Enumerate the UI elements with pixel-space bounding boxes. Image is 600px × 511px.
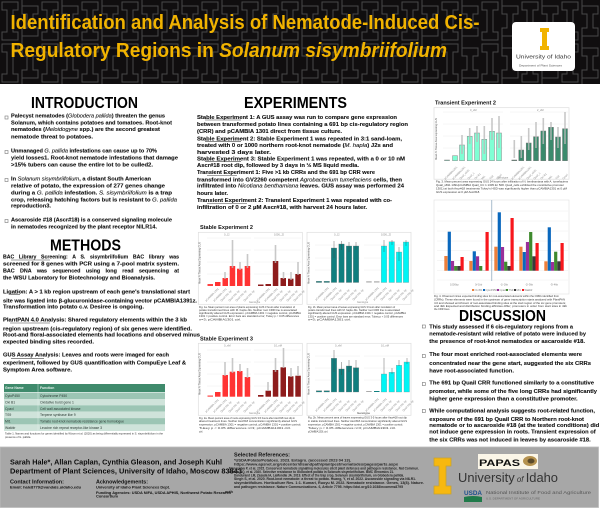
caption: stable experiment 2, leaves	[199, 305, 301, 322]
header banner	[0, 0, 600, 84]
table: gene names and functions: Wakblr	[5, 426, 16, 430]
bullet list: introduction: Palecyst nematodes (Globodera pallida) threaten the genus	[11, 114, 165, 120]
text block: methods: BAC Library Screening: A S. sisymbriifolium BAC library was	[3, 254, 179, 260]
bullet list: discussion: While computational analysis suggests root-related function,	[429, 408, 595, 414]
bar chart: transient experiment 2: 0_uM	[470, 108, 476, 112]
table: gene names and functions: CytoP450	[5, 394, 20, 398]
caption: transient experiment 2: Fig. 3. Mean percent area expressing GUS 24 hours after infiltration of N. benthamiana with A. tumefaciens	[436, 180, 568, 184]
bullet list: introduction: >15% tubers can cause the entire lot to be culled2.	[11, 162, 153, 168]
bullet list: introduction: Ascaroside #18 (Ascr#18) is a conserved signaling molecule	[11, 218, 172, 224]
legend: Cpaxl	[500, 288, 507, 292]
bar chart: stable experiment 3, red: Quail 691 bp	[219, 400, 233, 413]
bullet list: introduction: reproduction3.	[11, 204, 51, 210]
text block: experiments: (CRR) and pCAMBIA 1301 direct from tissue culture.	[197, 129, 342, 135]
selected references: Singh S, et al. 2020. Root-knot nematode: a threat to potato. Huang, Y, et al. 2022. Ascaroside signaling via NILR1.	[234, 477, 416, 481]
bar chart: stable experiment 3, teal and cyan: Quail 691 bp	[329, 399, 343, 412]
bar chart: stable experiment 3, red: pCAMBIA 1301	[263, 398, 279, 413]
bar chart: stable experiment 2, red: pCAMBIA 1301	[212, 287, 228, 302]
acknowledgements	[96, 480, 232, 499]
logo: University of Idaho department badge: Department of Plant Sciences	[519, 64, 563, 68]
bar chart: stable experiment 3, red: 0_nM	[224, 344, 230, 348]
bar chart: stable experiment 2, red	[198, 232, 306, 304]
title: Regulatory Regions in Solanum sisymbriifolium	[10, 40, 447, 62]
caption: stable experiment 2, roots: significantly altered GUS expression. pCAMBIA 1301 = negative control, pCAMBIA	[308, 311, 406, 315]
bar chart: stable experiment 3, red: Quail 691 bp	[278, 400, 292, 413]
authors and affiliation	[10, 460, 242, 476]
table caption: presence of G. pallida.	[5, 435, 31, 439]
selected references: *USDA/Potato/Potatoes. 2023. Extagro. (accessed 2023 04 13).	[234, 459, 351, 463]
bar chart: transient experiment 2: TS9	[488, 174, 495, 180]
caption: transient experiment 2: Quail_s691 1391/pCAMBIA Quail_CC 1 1305.for 508. Quail_cells exhibited the constitutive promoter	[436, 183, 564, 187]
bar chart: stable experiment 2, teal and cyan: Quail 691 bp	[344, 288, 358, 301]
text block: methods: BAC DNA was sequenced using long read sequencing at	[3, 268, 179, 274]
text block: experiments: hours later.	[197, 191, 228, 197]
logo: University of Idaho department badge	[512, 22, 575, 71]
bar chart: stable experiment 2, teal and cyan: Quail 691 bp	[337, 288, 351, 301]
table: gene names and functions: Function	[40, 386, 54, 390]
text block: methods: experiment, followed by GUS quantification with CompuEye Leaf &	[3, 361, 186, 367]
bar chart: stable experiment 2, red: Quail 691 bp	[219, 289, 233, 302]
text block: experiments: infiltration of 0 or 2 µM Ascr#18, with harvest 24 hours later.	[197, 205, 367, 211]
bar chart: stable experiment 3, red	[198, 343, 306, 415]
bar chart: stable experiment 2, teal and cyan	[307, 232, 415, 304]
bar chart: stable experiment 2, teal and cyan: 0_J2	[334, 232, 340, 236]
bar chart: stable experiment 3, red: pCAMBIA 1301	[212, 398, 228, 413]
bullet list: discussion: The four most enriched root-associated elements were	[429, 352, 582, 358]
bar chart: stable experiment 3, teal and cyan: pCAMBIA 1301	[314, 397, 330, 412]
bar chart: stable experiment 3, teal and cyan: Quail 691 bp	[401, 399, 415, 412]
text block: experiments: Ascr#18 root dip, followed by 3 days in ½ MS liquid media.	[197, 162, 359, 169]
bar chart: transient experiment 2: Mean % Tissue Area Expressing GUS	[435, 118, 438, 160]
bar chart: stable experiment 3, teal and cyan: Quail 691 bp	[387, 399, 401, 412]
caption: stable experiment 3, leaves: altered treatment lines. Neither Ascr#18 concentration significantly altered GUS	[199, 419, 297, 423]
legend: Wakblr	[524, 288, 533, 292]
bar chart: transient experiment 2: pCAMBIA1301	[443, 165, 459, 180]
bar chart: regulatory elements by upstream distance: -2/-3kb	[525, 282, 534, 286]
bar chart: stable experiment 2, red: pCAMBIA 1301	[263, 287, 279, 302]
caption: regulatory elements: (CRRs). These elements were found in the upstream of gene transcription starts analyzed with PlantPAN	[434, 298, 565, 302]
bar chart: transient experiment 2: pCAMBIA1301	[510, 165, 526, 180]
contact information: Contact Information:	[10, 480, 64, 486]
heading: discussion: DISCUSSION	[459, 308, 546, 325]
bar chart: regulatory elements by upstream distance	[434, 200, 569, 294]
bar chart: stable experiment 2, red: Quail 691 bp	[242, 289, 256, 302]
table: gene names and functions: Cytochrome P450	[40, 394, 67, 398]
selected references: Manosalva P, et al. 2015. Conserved nematode signalling molecules elicit plant defenses and pathogen resistance. Nat Commun.	[229, 466, 419, 470]
bar chart: stable experiment 3, red: pCAMBIA 1301	[204, 398, 220, 413]
bar chart: stable experiment 2, red: Quail 691 bp	[227, 289, 241, 302]
caption: stable experiment 3, roots	[308, 416, 407, 434]
bullet list: discussion	[422, 324, 600, 444]
bullet list: introduction: Unmanaged G. pallida infestations can cause up to 70%	[11, 149, 157, 155]
text block: experiments: Stable Experiment 1: A GUS assay was run to compare gene expression	[197, 115, 398, 121]
bullet list: discussion: promoter, while some of the five long CRRs had significantly	[429, 389, 598, 395]
bar chart: transient experiment 2: Quail_s691	[525, 168, 538, 180]
text block: experiments: Transient Experiment 2: Transient Experiment 1 was repeated with co-	[197, 198, 392, 204]
bar chart: stable experiment 2, teal and cyan: Genotype	[357, 300, 369, 304]
selected references: and pathogen resistance. Nature Communications. 6, Article 7795. https://doi.org/10.1038/ncomms8795	[234, 485, 403, 489]
caption: regulatory elements: the CRR lines.	[434, 307, 450, 311]
bullet list: introduction: relative of potato, the expression of 277 genes change	[11, 184, 165, 190]
caption: stable experiment 3, leaves: Fig. 2a. Mean percent area of roots expressing GUS 3-5 hours after Ascr#18 root dip in	[199, 416, 295, 420]
bar chart: stable experiment 2, teal and cyan: Quail 691 bp	[351, 288, 365, 301]
bar chart: stable experiment 2, teal and cyan: 1000_J2	[381, 232, 392, 236]
table: gene names and functions: TS9	[5, 413, 11, 417]
bar chart: transient experiment 2: pCAMBIA1391	[517, 165, 533, 180]
bar chart: stable experiment 2, red: pCAMBIA 1301	[204, 287, 220, 302]
text block: methods	[3, 254, 200, 374]
table: gene names and functions: MI1	[5, 420, 11, 424]
bar chart: regulatory elements by upstream distance: 0/-1kb	[475, 282, 483, 286]
acknowledgements: University of Idaho Plant Sciences Dept.	[96, 485, 170, 490]
logo: USDA NIFA	[464, 490, 592, 502]
logo: University of Idaho wordmark: University of Idaho	[458, 470, 558, 485]
bar chart: stable experiment 2, teal and cyan: pCAMBIA 1301	[364, 286, 380, 301]
bar chart: stable experiment 3, red: Quail 691 bp	[227, 400, 241, 413]
caption: stable experiment 2, leaves: 1301 = positive control. Error bars are standard error; Tukey p < 0.05 differences	[199, 314, 299, 318]
bar chart: stable experiment 3, teal and cyan	[307, 343, 415, 415]
selected references: https://www.apsnet.org/edcenter/disandpath/plantpest/nematodes/pages/parts.aspx	[234, 462, 399, 466]
bar chart: regulatory elements by upstream distance: -1/-2kb	[500, 282, 509, 286]
panel: experiments	[197, 95, 415, 434]
table: gene names and functions: Gene Name	[5, 386, 24, 390]
text block: experiments: between transformed potato lines containing a 691 bp cis-regulatory region	[197, 122, 409, 128]
bar chart: transient experiment 2: Oxi B1	[539, 172, 548, 180]
bar chart: stable experiment 2, teal and cyan: pCAMBIA 1301	[322, 286, 338, 301]
bar chart: stable experiment 2, red: Quail 691 bp	[270, 289, 284, 302]
text block: methods: site was ligated into β-glucuronidase-containing vector pCAMBIA1391z.	[3, 299, 197, 305]
bar chart: stable experiment 3, teal and cyan: Quail 691 bp	[344, 399, 358, 412]
bar chart: transient experiment 2: TS9	[554, 174, 561, 180]
table: gene names and functions: Leucine rich repeat receptor-like kinase 3	[40, 426, 102, 430]
caption: stable experiment 3, leaves	[199, 416, 301, 434]
table caption	[5, 432, 163, 439]
panel: methods	[3, 238, 200, 439]
caption: stable experiment 2, leaves: significantly altered GUS expression. pCAMBIA 1301 = negative control, pCAMBIA	[199, 311, 301, 315]
caption: stable experiment 3, roots: in stable transformed lines. Neither Ascr#18 concentration significantly altered GUS	[308, 419, 407, 423]
caption: stable experiment 2, roots: potato transformed lines with M. hapla J2s. Neither root CRR line is associated	[308, 308, 400, 312]
bullet list: discussion: nematode or to ascaroside #18 (at the tested conditions) did	[429, 423, 600, 429]
bullet list: discussion: The 691 bp Quail CRR functioned similarly to a constitutive	[429, 381, 594, 387]
logo: USDA NIFA: National Institute of Food and Agriculture	[486, 490, 592, 495]
legend: Oxi B1	[474, 288, 483, 292]
bullet list: discussion: not induce gene expression in roots. Transient expression of	[429, 430, 596, 436]
bullet list: introduction: Solanum, which contains potatoes and tomatoes. Root-knot	[11, 120, 172, 126]
caption: stable experiment 3, roots: Fig. 2b. Mean percent area of leaves expressing GUS 3-5 hours after Ascr#18 root dip	[308, 416, 407, 420]
bullet list: introduction	[5, 114, 178, 231]
bar chart: stable experiment 3, red: Quail 691 bp	[285, 400, 299, 413]
bullet list: discussion: nematode-resistant wild relative of potato were induced by	[429, 331, 587, 337]
table: gene names and functions	[4, 384, 165, 439]
caption: transient experiment 2	[436, 180, 568, 194]
bar chart: regulatory elements by upstream distance: -3/-4kb	[550, 282, 559, 286]
bar chart: stable experiment 3, red: Mean % Tissue Area Expressing GUS	[198, 353, 202, 395]
bar chart: stable experiment 2, teal and cyan: Quail 691 bp	[401, 288, 415, 301]
table: gene names and functions: Terpene synthase like 9	[40, 413, 76, 417]
bar chart: transient experiment 2: 2_uM	[537, 108, 544, 112]
bar chart: stable experiment 2, teal and cyan: Quail 691 bp	[329, 288, 343, 301]
bar chart: stable experiment 3, teal and cyan: pCAMBIA 1301	[372, 397, 388, 412]
bar chart: stable experiment 3, teal and cyan: Mean % Tissue Area Expressing GUS	[308, 353, 310, 395]
text block: experiments: treated with 0 or 1000 northern root-knot nematode ( M. hapla) J2s and	[197, 143, 394, 149]
acknowledgements: Acknowledgements:	[96, 480, 148, 486]
bullet list: introduction: nematode threat to potatoes.	[11, 134, 93, 140]
caption: stable experiment 2, roots: Fig. 1b. Mean percent area of leaves expressing GUS 3 hours after inoculation of	[308, 305, 395, 309]
bar chart: stable experiment 2, teal and cyan: pCAMBIA 1301	[314, 286, 330, 301]
selected references: Wixom AQ, et al. 2020. Selective resistance to Globodera pallida in Solanum sisymbriifolium. BMC Genomics 21.	[229, 470, 394, 474]
bar chart: stable experiment 3, teal and cyan: pCAMBIA 1301	[364, 397, 380, 412]
bar chart: stable experiment 2, red: Quail 691 bp	[292, 289, 306, 302]
logo: USDA NIFA: USDA	[464, 490, 482, 497]
text block: experiments	[197, 115, 409, 211]
bullet list: discussion: This study assessed if 6 cis-regulatory regions from a	[429, 324, 574, 330]
selected references: Selected References:	[234, 453, 290, 459]
text block: methods: Transformation into potato c.v. Desiree is ongoing.	[3, 305, 144, 311]
caption: regulatory elements: Fig. 4. Observed minus expected binding sites for root-associated elements within the CRRs identified from	[434, 294, 559, 298]
bar chart: transient experiment 2: MI1	[480, 174, 487, 180]
bar chart: transient experiment 2: pCAMBIA1391	[451, 165, 467, 180]
title	[10, 12, 480, 62]
text block: methods: Symptom Area software.	[3, 368, 72, 374]
caption: regulatory elements	[434, 294, 567, 311]
bar chart: stable experiment 3, teal and cyan: pCAMBIA 1301	[322, 397, 338, 412]
contact information	[10, 480, 82, 490]
bar chart: stable experiment 3, red: Quail 691 bp	[234, 400, 248, 413]
bar chart: stable experiment 2, red: Quail 691 bp	[234, 289, 248, 302]
text block: experiments: Stable Experiment 2: Stable Experiment 1 was repeated in 3:1 sand-loam,	[197, 136, 402, 142]
bar chart: stable experiment 3, teal and cyan: Quail 691 bp	[351, 399, 365, 412]
bar chart: stable experiment 2, red: 1000_J2	[274, 232, 285, 236]
text block: methods: GUS Assay Analysis: Leaves and roots were imaged for each	[3, 353, 170, 359]
bullet list: discussion: exposure of the 691 bp Quail CRR to Northern root-knot	[429, 417, 584, 423]
legend: TS9	[508, 288, 514, 292]
caption: stable experiment 2, leaves: Fig. 1a. Mean percent root area of plants expressing GUS 3 hours after inoculation of	[199, 305, 295, 309]
caption: stable experiment 3, roots: pCAMBIA1301 ctrl.	[308, 430, 328, 434]
panel: transient experiment 2	[434, 101, 569, 311]
authors and affiliation: Department of Plant Sciences, University of Idaho, Moscow 83843	[10, 469, 242, 476]
acknowledgements: Consortium	[96, 494, 119, 499]
table: gene names and functions: Tomato root-knot nematode resistance gene homologue	[40, 420, 124, 424]
bullet list: discussion: the six CRRs was not induced in leaves by ascaroside #18.	[429, 438, 591, 444]
selected references	[225, 453, 424, 494]
text block: methods: Root-and floral-associated elements had locations and observed minus	[3, 333, 200, 339]
bullet list: introduction: In Solanum sisymbriifolium, a distant South American	[11, 177, 152, 183]
table: gene names and functions: Oxi B1	[5, 400, 15, 404]
logo: University of Idaho gold I	[434, 458, 451, 494]
bar chart: stable experiment 2, teal and cyan: Quail 691 bp	[379, 288, 393, 301]
bar chart: stable experiment 3, red: Genotype	[249, 411, 261, 415]
bullet list: discussion: the presence of root-knot nematodes or ascaroside #18.	[429, 339, 585, 345]
text block: methods: PlantPAN 4.0 Analysis: Shared regulatory elements within the 3 kb	[3, 318, 188, 324]
bar chart: stable experiment 2, teal and cyan: Quail 691 bp	[394, 288, 408, 301]
caption: stable experiment 2, roots: n=3; pCAMBIA1301 ctrl.	[308, 318, 351, 322]
caption: stable experiment 3, roots: expression. pCAMBIA 1301 = negative control, pCAMBIA 1301 = positive control;	[308, 422, 403, 426]
bar chart: transient experiment 2: Quail_1	[466, 171, 476, 180]
bullet list: introduction: yield losses1. Root-knot nematode infestations that damage	[11, 156, 178, 162]
panel: discussion	[422, 308, 600, 444]
logo: PAPAS	[478, 454, 538, 469]
bar chart: stable experiment 3, red: Quail 691 bp	[242, 400, 256, 413]
bullet list: discussion: higher gene expression than a constitutive promoter.	[429, 396, 578, 402]
table: gene names and functions: Oxidative burst gene 1	[40, 400, 74, 404]
caption: transient experiment 2: GUS expression at 0 µM Ascr#18.	[436, 190, 480, 194]
bullet list: introduction: during a G. pallida infestation. S. sisymbriifolium is a trap	[11, 190, 173, 196]
acknowledgements: Funding Agencies: USDA NIFA, USDA APHIS, Northwest Potato Research	[96, 490, 232, 495]
heading: stable experiment 2: Stable Experiment 2	[200, 225, 253, 231]
bar chart: stable experiment 2, red: 0_J2	[224, 232, 230, 236]
contact information: Email: hale8779@vandals.uidaho.edu	[10, 485, 82, 490]
heading: stable experiment 3: Stable Experiment 3	[200, 337, 253, 343]
bar chart: stable experiment 3, teal and cyan: Quail 691 bp	[379, 399, 393, 412]
bullet list: introduction: nematodes (Meloidogyne spp.) are the second greatest	[11, 127, 160, 133]
bar chart: stable experiment 2, red: Quail 691 bp	[285, 289, 299, 302]
caption: stable experiment 3, leaves: expression. pCAMBIA 1301 = negative control, pCAMBIA 1301 = positive control;	[199, 422, 301, 426]
footer band	[0, 447, 598, 508]
caption: stable experiment 2, roots: 1301 = positive control. Error bars are standard error; Tukey p < 0.05 differences	[308, 314, 403, 318]
text block: methods: expected binding sites recorded.	[3, 340, 94, 346]
logo: University of Idaho department badge: University of Idaho	[516, 54, 571, 60]
bar chart: transient experiment 2: Quail_1	[532, 171, 542, 180]
bar chart: transient experiment 2: MI1	[547, 174, 554, 180]
caption: stable experiment 2, leaves: potato transformed lines with M. hapla J2s. Neither root CRR line is associated	[199, 308, 297, 312]
table: gene names and functions: Cell wall associated kinase	[40, 407, 81, 411]
bar chart: stable experiment 3, teal and cyan: Quail 691 bp	[394, 399, 408, 412]
text block: methods: the WSU Laboratory for Biotechnology and Bioanalysis.	[3, 275, 155, 281]
bar chart: stable experiment 2, red: Genotype	[249, 300, 261, 304]
caption: stable experiment 3, leaves: Tukey p < 0.05 differences n=3; pCAMBIA1301 ctrl.	[199, 426, 291, 430]
text block: experiments: transformed into GV2260 competent Agrobacterium tumefaciens cells, then	[197, 178, 403, 184]
bar chart: regulatory elements by upstream distance: 1000bp	[450, 282, 459, 286]
bar chart: stable experiment 2, red: Quail 691 bp	[278, 289, 292, 302]
legend: MI1	[516, 288, 521, 292]
bar chart: stable experiment 3, teal and cyan: Genotype	[357, 411, 370, 415]
bar chart: stable experiment 2, teal and cyan: Quail 691 bp	[387, 288, 401, 301]
text block: methods: Ligation: A > 1 kb region upstream of each gene's translational start	[3, 290, 190, 296]
bar chart: stable experiment 2, teal and cyan: pCAMBIA 1301	[372, 286, 388, 301]
caption: stable experiment 3, leaves: ctrl.	[199, 430, 203, 434]
bar chart: stable experiment 3, teal and cyan: 10_nM	[381, 344, 389, 348]
caption: stable experiment 2, leaves: n=3; pCAMBIA1301 ctrl.	[199, 318, 241, 322]
selected references: Dandurand LM, Zasada IA, LaMondia JA. 2019. Effect of the trap crop, Solanum sisymbriifolium, on Globodera pallida.	[234, 474, 404, 478]
selected references: sisymbriifolium. Horticulture Res. 1:1. Kumari, Ruoyu M. 2022. Nematode resistance. Genes, 13(8). Nature.	[234, 481, 424, 485]
selected references: auth	[225, 490, 234, 494]
legend: CytoP450	[486, 288, 497, 292]
caption: stable experiment 2, roots	[308, 305, 406, 322]
table: gene names and functions: Cpaxl	[5, 407, 14, 411]
bar chart: stable experiment 3, red: Quail 691 bp	[270, 400, 284, 413]
text block: methods: screened for 8 genes with PCR using a 7-pool matrix system.	[3, 261, 179, 267]
bar chart: transient experiment 2: Quail_s691	[458, 168, 471, 180]
text block: experiments: Stable Experiment 3: Stable Experiment 1 was repeated, with a 0 or 10 nM	[197, 157, 405, 163]
text block: methods: region upstream (cis-regulatory region) of six genes were identified.	[3, 327, 192, 333]
text block: experiments: infiltrated into Nicotiana benthamiana leaves. GUS assay was performed 24	[197, 184, 405, 190]
bar chart: stable experiment 3, red: pCAMBIA 1301	[255, 398, 271, 413]
heading: transient experiment 2: Transient Experiment 2	[435, 101, 496, 107]
bar chart: stable experiment 3, red: 10_nM	[274, 344, 282, 348]
text block: experiments: Transient Experiment 1: Five >1 kb CRRs and the 691 bp CRR were	[197, 170, 375, 176]
logo: PAPAS: PAPAS	[479, 458, 520, 468]
heading: experiments: EXPERIMENTS	[244, 95, 347, 112]
legend	[472, 288, 533, 292]
bullet list: discussion: have root-associated function.	[429, 369, 514, 375]
bar chart: transient experiment 2	[434, 108, 569, 180]
bar chart: transient experiment 2: Cpaxl	[561, 173, 569, 180]
caption: regulatory elements: and 4kb Expected and distribution binding affinities differ; promoters in order from start sites in 4kb	[434, 304, 567, 308]
table caption: Table 1. Names and functions for genes identified by Wixom et al. (2020) as being differentially expressed in S. sisymbriifolium in the	[5, 432, 163, 436]
bullet list: introduction: crop, releasing hatching factors but is resistant to G. pallida	[11, 197, 177, 203]
authors and affiliation: Sarah Hale*, Allan Caplan, Cynthia Gleason, and Joseph Kuhl	[10, 460, 222, 467]
text block: experiments: harvested 3 days later.	[197, 150, 272, 156]
bar chart: stable experiment 3, red: Quail 691 bp	[292, 400, 306, 413]
heading: methods: METHODS	[50, 238, 121, 255]
bar chart: stable experiment 3, teal and cyan: Quail 691 bp	[337, 399, 351, 412]
panel: introduction	[5, 95, 178, 231]
title: Identification and Analysis of Nematode-Induced Cis-	[10, 12, 480, 34]
bar chart: transient experiment 2: Oxi B1	[473, 172, 482, 180]
logo: USDA NIFA: U.S. DEPARTMENT OF AGRICULTURE	[486, 496, 540, 500]
bar chart: stable experiment 2, red: pCAMBIA 1301	[255, 287, 271, 302]
bar chart: stable experiment 3, teal and cyan: 0_nM	[335, 344, 342, 348]
bar chart: transient experiment 2: Cpaxl	[495, 173, 503, 180]
caption: regulatory elements: 4.0 and showed enrichment of root-associated binding sites at the start region of the six gene promoters;	[434, 301, 566, 305]
caption: transient experiment 2: 1301) at both Ascr#18 treatments Tukey's HSD was significantly higher than pCAMBIA1301 at 0 µM	[436, 186, 567, 190]
bar chart: stable experiment 2, teal and cyan: Mean % Tissue Area Expressing GUS	[308, 242, 310, 284]
bar chart: stable experiment 2, red: Mean % Tissue Area Expressing GUS	[198, 242, 202, 284]
bullet list: discussion: concentrated near the gene start, suggested the six CRRs	[429, 361, 591, 367]
bullet list: introduction: in nematodes recognized by the plant receptor NILR14.	[11, 225, 157, 231]
bar chart: transient experiment 2: Genotype	[497, 176, 509, 180]
heading: introduction: INTRODUCTION	[31, 95, 138, 112]
caption: stable experiment 3, roots: Tukey p < 0.05 differences n=3; pCAMBIA1301 ctrl.	[308, 426, 396, 430]
